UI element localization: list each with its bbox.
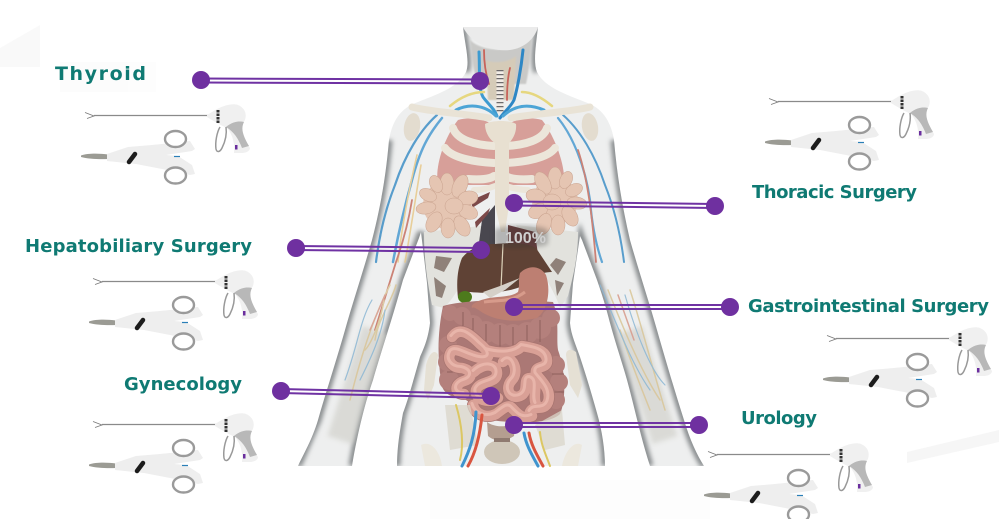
colon bbox=[438, 300, 568, 422]
connector: hepatobiliary surgery bbox=[287, 239, 490, 259]
connector: gynecology bbox=[272, 382, 500, 405]
connector: thyroid bbox=[192, 71, 489, 90]
instruments: thyroid bbox=[81, 104, 250, 184]
connector: gastrointestinal surgery bbox=[505, 298, 739, 316]
heading: Gynecology: Gynecology bbox=[124, 374, 242, 395]
lower ribs bbox=[474, 186, 528, 190]
pancreas detail bbox=[483, 278, 520, 298]
body silhouette bbox=[298, 27, 704, 466]
stomach bbox=[472, 267, 548, 321]
heading: Gastrointestinal Surgery: Gastrointestinal Surgery bbox=[748, 296, 989, 317]
neck vessels bbox=[450, 50, 552, 118]
instruments: hepatobiliary surgery bbox=[89, 270, 258, 350]
head and neck bbox=[463, 27, 538, 113]
human anatomy figure bbox=[298, 27, 704, 466]
connector: thoracic surgery bbox=[505, 194, 724, 215]
heading: Thoracic Surgery: Thoracic Surgery bbox=[752, 182, 917, 203]
small intestine bbox=[448, 330, 549, 417]
deltoid bones bbox=[402, 112, 600, 142]
dark gaps below the breastbone bbox=[472, 192, 538, 255]
instruments: gynecology bbox=[89, 413, 258, 492]
heading: Thyroid: Thyroid bbox=[55, 63, 146, 85]
lower ribs and abdomen wall bbox=[424, 225, 578, 308]
percent overlay bbox=[494, 226, 548, 248]
breast tissue bbox=[415, 167, 588, 239]
instruments: thoracic surgery bbox=[765, 90, 934, 170]
percent overlay: 100% bbox=[505, 230, 546, 247]
instruments: urology bbox=[704, 443, 873, 519]
heading: Urology: Urology bbox=[741, 408, 817, 429]
instruments: gastrointestinal surgery bbox=[823, 327, 992, 406]
sternum bbox=[485, 121, 516, 232]
gallbladder bbox=[458, 291, 472, 303]
connector: urology bbox=[505, 416, 708, 434]
pelvic vessels bbox=[456, 405, 550, 466]
liver bbox=[457, 243, 552, 298]
arm vessels bbox=[345, 115, 665, 410]
lungs bbox=[437, 118, 564, 185]
heading: Hepatobiliary Surgery: Hepatobiliary Surgery bbox=[25, 236, 252, 257]
rib cage bbox=[412, 107, 590, 179]
pelvis and bladder bbox=[421, 350, 582, 466]
